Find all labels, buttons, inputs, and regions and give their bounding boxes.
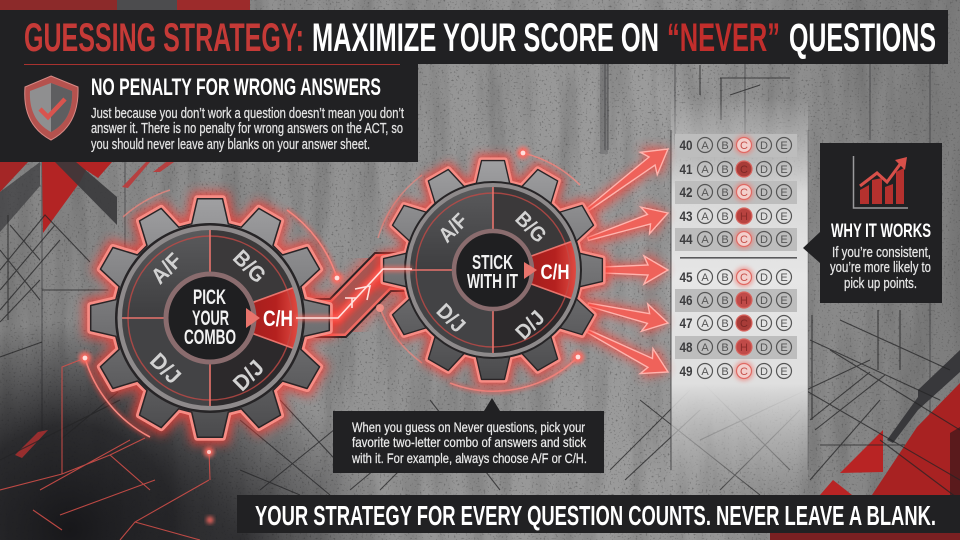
- row 46: 46: [680, 292, 693, 308]
- row 45: C: [740, 272, 748, 284]
- row 42: D: [760, 187, 768, 199]
- connector highlight line: [296, 269, 412, 318]
- row 42: B: [721, 187, 729, 199]
- segment labels: B/G: [228, 245, 271, 288]
- row 47: A: [701, 318, 709, 330]
- row 47: C: [740, 318, 748, 330]
- row 41: E: [780, 164, 788, 176]
- segment labels: D/J: [432, 299, 470, 337]
- row 43: E: [780, 211, 788, 223]
- hub: [454, 231, 532, 309]
- row 45: [680, 267, 792, 287]
- callout: combo advice: [333, 398, 604, 473]
- title band: [0, 10, 948, 64]
- row 48: 48: [680, 339, 693, 355]
- segment labels: C/H: [263, 306, 293, 331]
- label: stick with it: [467, 252, 518, 293]
- row 42: C: [740, 187, 748, 199]
- arrow to row 40: [577, 135, 679, 224]
- callout: combo advice: favorite two-letter combo of answers and stick: [352, 434, 587, 450]
- segment labels: [145, 245, 293, 396]
- panel: why it works: [803, 143, 942, 303]
- row 48: H: [740, 342, 748, 354]
- row 44: 44: [680, 231, 693, 247]
- row 48: D: [760, 342, 768, 354]
- label: pick your combo: [184, 286, 236, 349]
- row 44: [675, 228, 797, 251]
- row 48: A: [701, 342, 709, 354]
- row 45: A: [701, 272, 709, 284]
- row 46: [675, 289, 797, 312]
- row 47: E: [780, 318, 788, 330]
- row 43: D: [760, 211, 768, 223]
- row 48: B: [721, 342, 729, 354]
- row 47: 47: [680, 315, 693, 331]
- label: pick your combo: YOUR: [192, 307, 229, 330]
- row 49: E: [780, 366, 788, 378]
- row 40: D: [760, 140, 768, 152]
- body text: [91, 106, 404, 153]
- red geometric shapes bottom-right: [770, 350, 960, 540]
- segment labels: A/F: [434, 209, 473, 247]
- arrow to row 43: [583, 196, 674, 256]
- row 41: 41: [680, 161, 693, 177]
- row 46: A: [701, 295, 709, 307]
- row 49: C: [740, 366, 748, 378]
- row 42: 42: [680, 184, 693, 200]
- segment labels: B/G: [510, 207, 551, 248]
- row 44: B: [721, 234, 729, 246]
- row 42: A: [701, 187, 709, 199]
- row 49: 49: [680, 363, 693, 379]
- label: stick with it: WITH IT: [467, 271, 518, 293]
- segment labels: D/J: [228, 355, 269, 396]
- body text: you should never leave any blanks on your answer sheet.: [91, 137, 370, 153]
- circuit dot lower left: [204, 447, 214, 524]
- row 45: E: [780, 272, 788, 284]
- row 46: E: [780, 295, 788, 307]
- row 49: A: [701, 366, 709, 378]
- row 42: E: [780, 187, 788, 199]
- gear: stick with it: [384, 161, 602, 379]
- callout: combo advice: When you guess on Never questions, pick your: [352, 419, 585, 435]
- row 41: [680, 161, 792, 177]
- row 44: D: [760, 234, 768, 246]
- row 41: A: [701, 164, 709, 176]
- row 43: B: [721, 211, 729, 223]
- row 43: [680, 208, 792, 224]
- segment labels: D/J: [511, 306, 549, 344]
- row 41: B: [721, 164, 729, 176]
- row 49: D: [760, 366, 768, 378]
- icon: shield with check: [25, 76, 78, 140]
- row 42: [675, 181, 797, 204]
- callout: combo advice: with it. For example, always choose A/F or C/H.: [351, 450, 587, 466]
- title text: MAXIMIZE YOUR SCORE ON: [312, 16, 659, 60]
- row 46: H: [740, 295, 748, 307]
- body text: pick up points.: [844, 276, 917, 292]
- row 41: D: [760, 164, 768, 176]
- arc end dots: [79, 147, 584, 364]
- pointer triangle: [524, 262, 537, 279]
- label: pick your combo: PICK: [193, 286, 226, 309]
- label: stick with it: STICK: [472, 252, 513, 274]
- row 47: D: [760, 318, 768, 330]
- row 44: E: [780, 234, 788, 246]
- title text: [24, 16, 936, 60]
- row 43: 43: [680, 208, 693, 224]
- segment labels: A/F: [146, 248, 187, 289]
- row 43: A: [701, 211, 709, 223]
- body text: [830, 245, 931, 292]
- row 49: B: [721, 366, 729, 378]
- row 47: [680, 315, 792, 331]
- row 40: C: [740, 140, 748, 152]
- segment labels: [432, 207, 570, 344]
- label: pick your combo: COMBO: [184, 326, 236, 349]
- row 48: E: [780, 342, 788, 354]
- gear: pick your combo: [91, 199, 329, 437]
- body text: you’re more likely to: [830, 260, 931, 276]
- arrow to row 49: [580, 315, 676, 388]
- heading: NO PENALTY FOR WRONG ANSWERS: [91, 74, 381, 101]
- pointer triangle: [246, 308, 260, 328]
- arrow to row 47: [584, 287, 672, 341]
- arrow to row 45: [602, 252, 668, 288]
- red geometric shapes top-left: [0, 0, 250, 458]
- row 40: [675, 134, 797, 157]
- row 45: B: [721, 272, 729, 284]
- panel: no penalty: [0, 64, 418, 162]
- row 49: [680, 361, 792, 381]
- connector between gears: [298, 272, 420, 318]
- row 45: 45: [680, 269, 693, 285]
- row 40: A: [701, 140, 709, 152]
- row 40: E: [780, 140, 788, 152]
- segment labels: D/J: [145, 348, 186, 389]
- row 44: C: [740, 234, 748, 246]
- segment labels: C/H: [540, 261, 570, 284]
- glow arcs around gears: [85, 153, 580, 437]
- icon: rising chart: [854, 156, 908, 208]
- title text: “NEVER”: [667, 16, 780, 60]
- body text: answer it. There is no penalty for wrong answers on the ACT, so: [91, 121, 403, 137]
- hub: [166, 274, 254, 362]
- body text: Just because you don’t work a question doesn’t mean you don’t: [91, 106, 404, 122]
- row 40: 40: [680, 137, 693, 153]
- answer sheet: [671, 97, 808, 495]
- title text: GUESSING STRATEGY:: [24, 16, 304, 60]
- red circuit lines lower left: [0, 360, 210, 540]
- row 46: B: [721, 295, 729, 307]
- row 40: B: [721, 140, 729, 152]
- row 47: B: [721, 318, 729, 330]
- row 41: C: [740, 164, 748, 176]
- row 48: [675, 336, 797, 359]
- row 46: D: [760, 295, 768, 307]
- row 44: A: [701, 234, 709, 246]
- row 43: H: [740, 211, 748, 223]
- row 45: D: [760, 272, 768, 284]
- body text: If you’re consistent,: [832, 245, 931, 261]
